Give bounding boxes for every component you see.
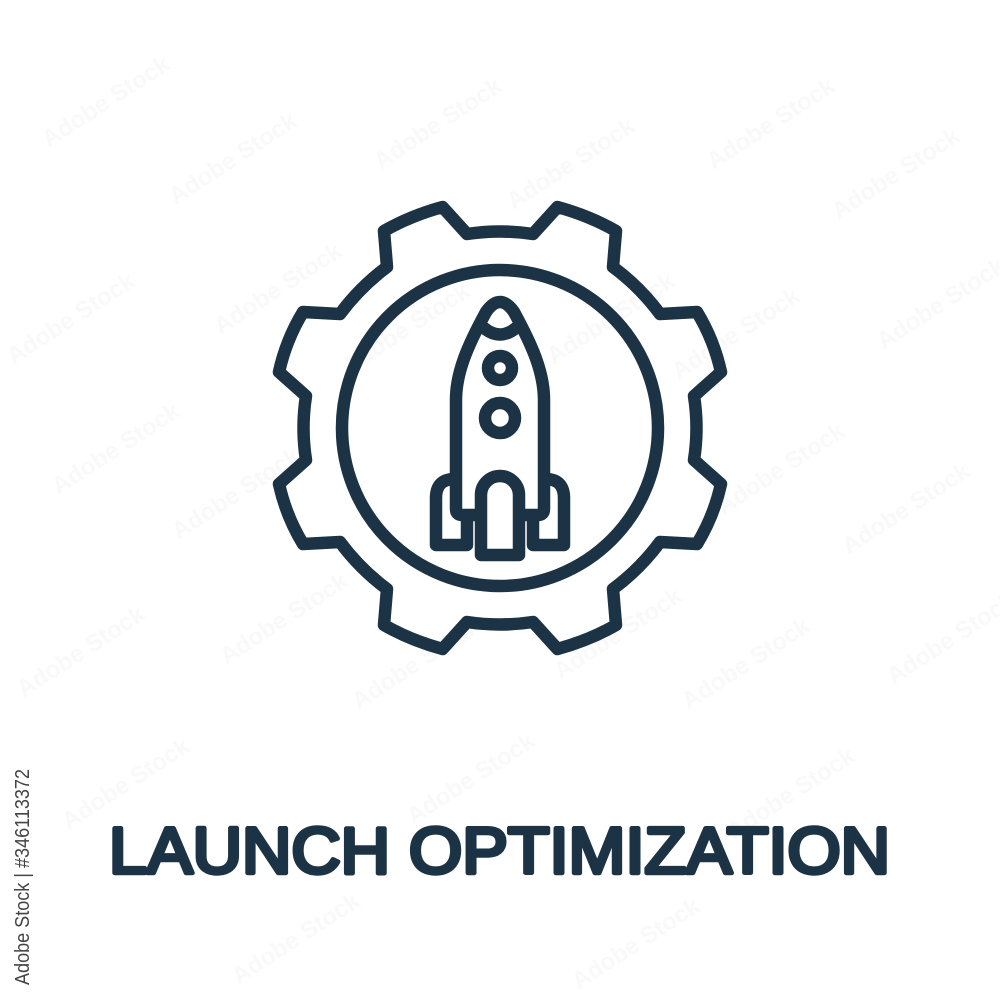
text: Adobe Stock [542, 267, 680, 370]
text: Adobe Stock [47, 397, 185, 500]
text: Adobe Stock [667, 282, 805, 385]
text: Adobe Stock [167, 442, 305, 545]
text: Adobe Stock [549, 582, 687, 685]
text: Adobe Stock [227, 887, 365, 990]
text: Adobe Stock [677, 612, 815, 715]
text: Adobe Stock [567, 892, 705, 995]
icon: gear with rocket [279, 207, 721, 649]
rocket porthole upper [488, 356, 512, 380]
gear inner ring [342, 270, 658, 586]
rocket body [456, 302, 544, 515]
title: LAUNCH OPTIMIZATION [109, 814, 890, 887]
text: Adobe Stock [12, 600, 150, 703]
gear outline [279, 207, 721, 649]
text: Adobe Stock [502, 112, 640, 215]
text: Adobe Stock [347, 612, 485, 715]
text: Adobe Stock [215, 567, 353, 670]
text: Adobe Stock [722, 742, 860, 845]
text: Adobe Stock [209, 237, 347, 340]
text: Adobe Stock [57, 732, 195, 835]
text: Adobe Stock [337, 277, 475, 380]
text: Adobe Stock [702, 72, 840, 175]
rocket centre nozzle [481, 476, 519, 555]
text: Adobe Stock [164, 107, 302, 210]
text: Adobe Stock [369, 72, 507, 175]
rocket right fin [533, 479, 564, 545]
text: Adobe Stock [827, 122, 965, 225]
rocket left fin [436, 479, 467, 545]
text: Adobe Stock [837, 457, 975, 560]
text: Adobe Stock [712, 417, 850, 520]
rocket nose line [484, 328, 516, 334]
stock id sidebar: Adobe Stock | #346113372 [12, 769, 34, 985]
text: Adobe Stock [37, 50, 175, 153]
rocket porthole lower [485, 403, 515, 433]
text: Adobe Stock [2, 267, 140, 370]
text: Adobe Stock [402, 727, 540, 830]
